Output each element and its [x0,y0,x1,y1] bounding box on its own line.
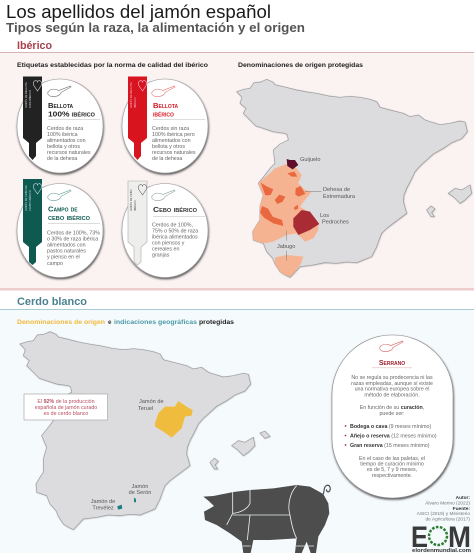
label: Jamón de Serón: de Serón [129,490,151,496]
card: Campo de cebo ibérico: campo [47,261,63,267]
label: Jamón de Trevélez [91,499,115,512]
label: Jamón de Serón [129,484,151,496]
card: Bellota ibérico: 100% ibérica pero [152,132,195,138]
card: Bellota 100% ibérico: 100% ibérico [48,110,95,118]
leader lines [287,192,322,261]
card: Cebo ibérico: Cerdos de 100%, [152,222,193,228]
panel: Serrano: En función de su curación, [360,405,424,411]
panel: Serrano [332,335,453,498]
map: Spain cerdo blanco [20,332,270,530]
label: Jamón de Teruel: Jamón de [139,399,164,405]
credits: Álvaro Merino (2022) [425,500,470,506]
label: Los Pedroches: Pedroches [322,220,349,226]
card: Bellota 100% ibérico: JAMÓN DE BELLOTA [23,82,28,108]
panel: Serrano: Gran reserva (15 meses mínimo) [350,443,430,449]
region: Teruel [155,401,193,438]
credits: Autor: [456,495,470,501]
card: Bellota 100% ibérico: alimentados con [47,138,86,144]
logo: El Orden Mundial [411,521,471,553]
panel: Serrano: una normativa europea sobre el [355,386,429,392]
card: Cebo ibérico: JAMÓN DE CEBO [128,190,133,211]
panel: Serrano: respectivamente. [372,473,412,479]
card: Bellota ibérico: alimentados con [152,138,191,144]
card: Bellota 100% ibérico: 100% ibérica [47,132,78,138]
label: Guijuelo: Guijuelo [300,157,321,163]
panel: Serrano: Añejo o reserva (12 meses mínimo) [350,434,437,440]
card: Campo de cebo ibérico: Cerdos de 100%, 73% [47,230,100,236]
icon: ham [380,341,403,352]
label: Jamón de Trevélez: Trevélez [92,506,114,512]
label: Jamón de Serón: Jamón [132,484,148,490]
region: Los Pedroches [293,210,319,235]
card: Cebo ibérico: ibérica alimentados [152,234,198,240]
card: Bellota 100% ibérico: 100% IBÉRICO [27,90,32,108]
region: Trevélez [117,505,122,510]
panel: Serrano: Bodega o cava (9 meses mínimo) [350,424,431,430]
panel: Serrano: Serrano [379,360,405,367]
subheading: denominaciones e indicaciones: protegidas [199,319,235,326]
card: Bellota ibérico: IBÉRICO [132,97,137,108]
callout: 92% [24,394,108,420]
card: Campo de cebo ibérico: pastos naturales [47,248,86,254]
title: Los apellidos del jamón español [6,2,271,22]
card: Bellota ibérico: JAMÓN DE BELLOTA [128,82,133,108]
panel: Serrano: tiempo de curación mínimo [360,462,424,468]
subheading: denominaciones e indicaciones: e [108,319,112,326]
card: Campo de cebo ibérico: o 30% de raza ibérica [47,236,98,242]
label: Los Pedroches [320,213,349,226]
card: Bellota ibérico [122,76,208,173]
region: dehesa area [253,164,318,243]
card: Campo de cebo ibérico: y pienso en el [47,254,80,260]
card: Campo de cebo ibérico [17,179,103,278]
panel: Serrano: En el caso de las paletas, el [359,456,425,462]
card: Campo de cebo ibérico: CAMPO IBÉRICO [27,190,32,211]
region: Guijuelo [287,159,298,169]
heading: Cerdo blanco: Cerdo blanco [17,296,87,308]
card: Bellota 100% ibérico [17,76,103,173]
card: Bellota 100% ibérico: Bellota [48,101,73,110]
card: Campo de cebo ibérico: JAMÓN DE CEBO DE [23,185,28,211]
credits: Fuente: [453,506,470,512]
label: Dehesa de Extremadura [323,187,356,200]
panel: Serrano: razas empleadas, aunque sí existe [351,381,433,387]
pig silhouette [203,485,330,553]
card: Bellota 100% ibérico: Cerdos de raza [47,126,83,132]
card: Campo de cebo ibérico: alimentados con [47,242,86,248]
subheading: denominaciones: Denominaciones de origen protegidas [238,62,364,69]
card: Campo de cebo ibérico: Campo de [48,204,78,214]
label: Dehesa de Extremadura: Dehesa de [323,187,350,193]
card: Bellota 100% ibérico: bellota y otros [47,144,80,150]
card: Cebo ibérico: Cebo ibérico [153,205,197,214]
card: Cebo ibérico: 75% o 50% de raza [152,228,198,234]
map: Spain ibérico regions [237,79,472,277]
panel: Serrano: No se regula su prodecencia ni las [351,375,433,381]
callout: 92%: española de jamón curado [35,405,97,411]
credits [417,495,470,522]
card: Campo de cebo ibérico: cebo ibérico [48,213,90,222]
label: Dehesa de Extremadura: Extremadura [323,194,356,200]
credits: ASICI (2019) y Ministerio [417,511,470,517]
subheading: etiquetas: Etiquetas establecidas por la norma de calidad del ibérico [17,62,208,69]
region: Serón [134,498,136,502]
card: Cebo ibérico [122,181,208,278]
card: Cebo ibérico: IBÉRICO [132,200,137,211]
label: Los Pedroches: Los [320,213,329,219]
panel: Serrano: puede ser: [379,411,405,417]
card: Bellota 100% ibérico: de la dehesa [47,156,77,162]
panel: Serrano: es de 5, 7 y 9 meses, [367,467,417,473]
subheading: denominaciones e indicaciones: Denominaciones de origen [17,319,105,326]
label: Jamón de Teruel [138,399,164,412]
card: Bellota ibérico: de la dehesa [152,156,182,162]
credits: de Agricultura (2017) [425,516,470,522]
card: Bellota ibérico: ibérico [153,110,174,118]
card: Bellota ibérico: Bellota [153,101,178,110]
panel: Serrano: método de elaboración. [364,392,420,398]
callout: 92%: El 92% de la producción [37,399,95,405]
callout: 92%: es de cerdo blanco [44,411,88,417]
card: Bellota ibérico: bellota y otros [152,144,185,150]
region: Dehesa de Extremadura patches [260,172,305,226]
card: Cebo ibérico: granjas [152,252,170,258]
subtitle: Tipos según la raza, la alimentación y el origen [6,21,305,35]
card: Bellota ibérico: Cerdos sin raza [152,126,189,132]
card: Bellota 100% ibérico: recursos naturales [47,150,91,156]
subheading: denominaciones e indicaciones: indicaciones geográficas [114,319,198,326]
card: Bellota ibérico: recursos naturales [152,150,196,156]
label: Jamón de Trevélez: Jamón de [91,499,115,505]
label: Jamón de Teruel: Teruel [138,406,153,412]
card: Cebo ibérico: cereales en [152,246,179,252]
card: Cebo ibérico: con piensos y [152,240,185,246]
heading: Ibérico: Ibérico [17,40,52,52]
subheading: denominaciones e indicaciones [17,319,235,326]
region: Jabugo south [275,255,303,277]
label: Jabugo: Jabugo [277,244,295,250]
